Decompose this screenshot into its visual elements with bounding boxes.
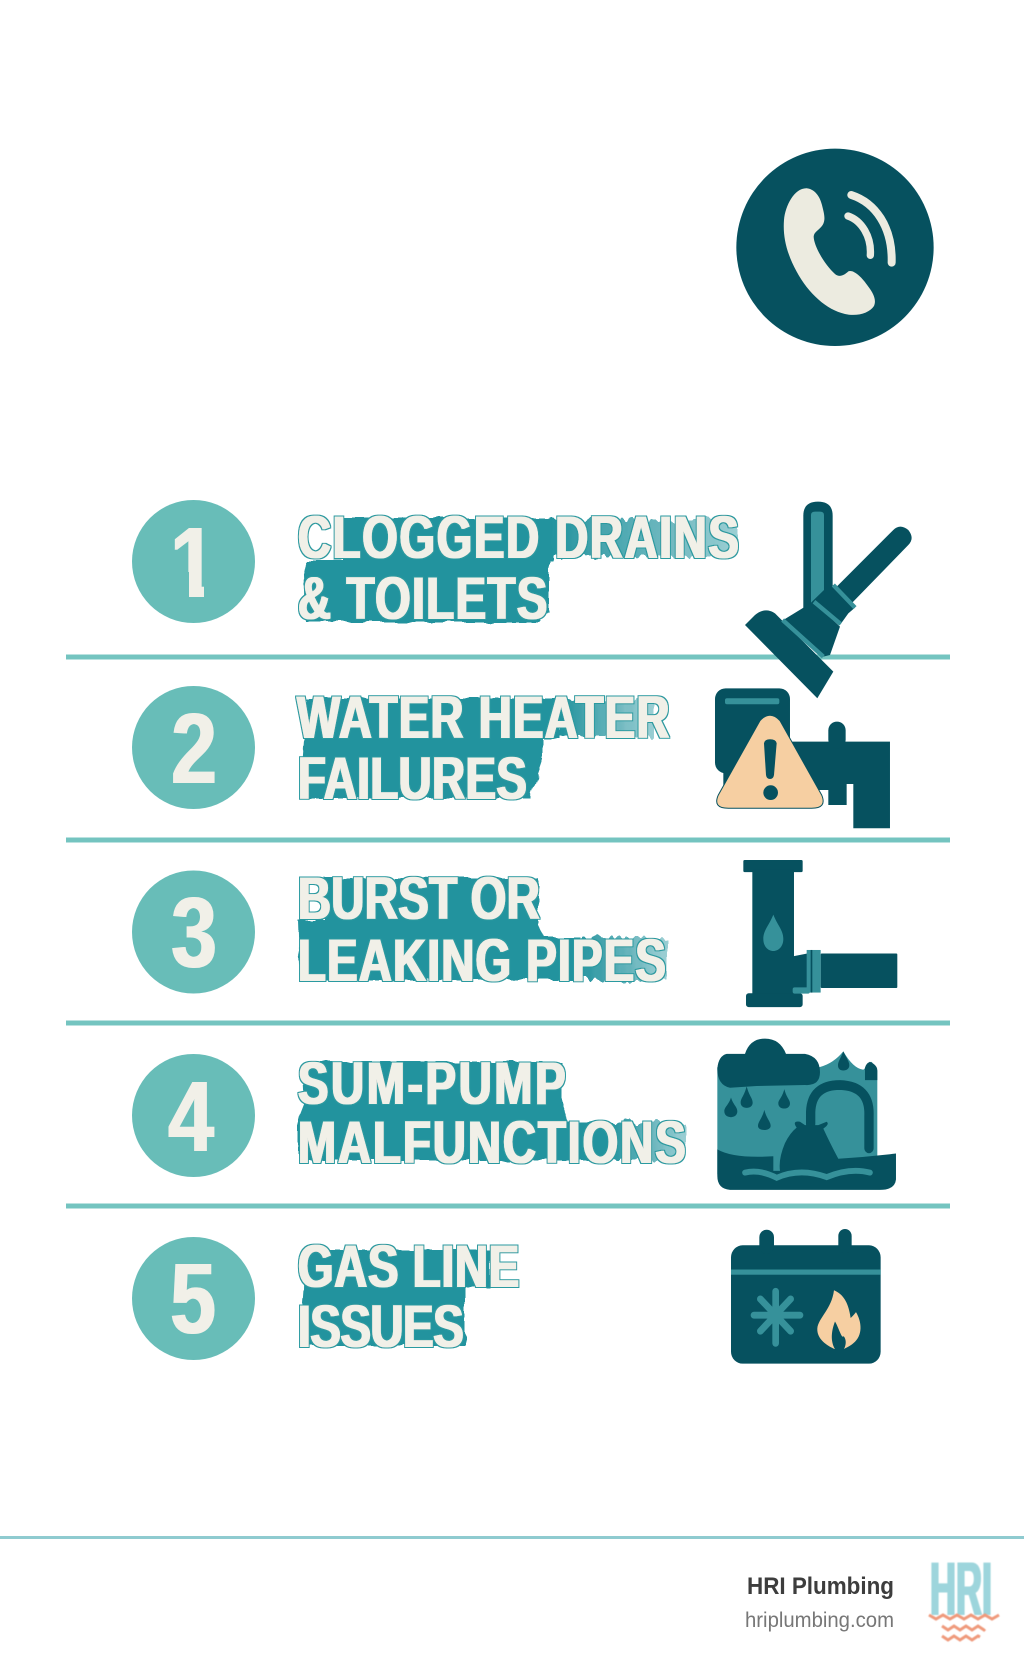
footer: brand text: hriplumbing.com (745, 1609, 894, 1632)
icon: phone in circle (736, 149, 934, 346)
heading: clogged drains and toilets: & TOILETS (298, 566, 547, 633)
panel: item 2 water heater failures (132, 685, 890, 828)
panel: item 4 sump pump malfunctions (132, 1039, 896, 1190)
number badge 4 (132, 1054, 255, 1177)
heading: water heater failures (297, 685, 669, 813)
icon: flooded basement with rain (717, 1039, 896, 1190)
heading: sump pump malfunctions (298, 1051, 686, 1177)
number badge 3: 3 (171, 877, 217, 989)
heading: gas line issues (298, 1234, 519, 1361)
heading: gas line issues: ISSUES (298, 1294, 464, 1361)
icon: water heater with warning triangle (715, 688, 890, 828)
number badge 2: 2 (171, 693, 217, 805)
icon: leaking pipe (743, 860, 897, 1007)
logo: HRI with waves (929, 1547, 999, 1640)
heading: clogged drains and toilets: CLOGGED DRAINS (298, 505, 739, 572)
number badge 1: 1 (170, 507, 216, 619)
icon: plunger (745, 502, 912, 698)
footer: brand text: HRI Plumbing (747, 1573, 894, 1600)
heading: clogged drains and toilets (298, 505, 739, 633)
number badge 3 (132, 870, 255, 994)
heading: burst or leaking pipes: BURST OR (298, 866, 540, 933)
number badge 5: 5 (170, 1243, 216, 1355)
heading: burst or leaking pipes (298, 866, 666, 995)
panel: item 5 gas line issues (132, 1229, 881, 1364)
footer: brand text (745, 1573, 894, 1632)
number badge 4: 4 (168, 1061, 214, 1173)
heading: water heater failures: FAILURES (298, 746, 527, 813)
heading: sump pump malfunctions: SUM-PUMP (298, 1051, 566, 1118)
heading: sump pump malfunctions: MALFUNCTIONS (298, 1110, 686, 1177)
number badge 1 (132, 500, 255, 623)
heading: water heater failures: WATER HEATER (297, 685, 669, 752)
heading: gas line issues: GAS LINE (298, 1234, 519, 1301)
panel: item 1 clogged drains (132, 500, 912, 698)
panel: item 3 burst or leaking pipes (132, 860, 897, 1007)
heading: burst or leaking pipes: LEAKING PIPES (298, 928, 666, 995)
number badge 5 (132, 1237, 255, 1360)
number badge 2 (132, 686, 255, 809)
icon: calendar with snowflake and flame (731, 1229, 881, 1364)
